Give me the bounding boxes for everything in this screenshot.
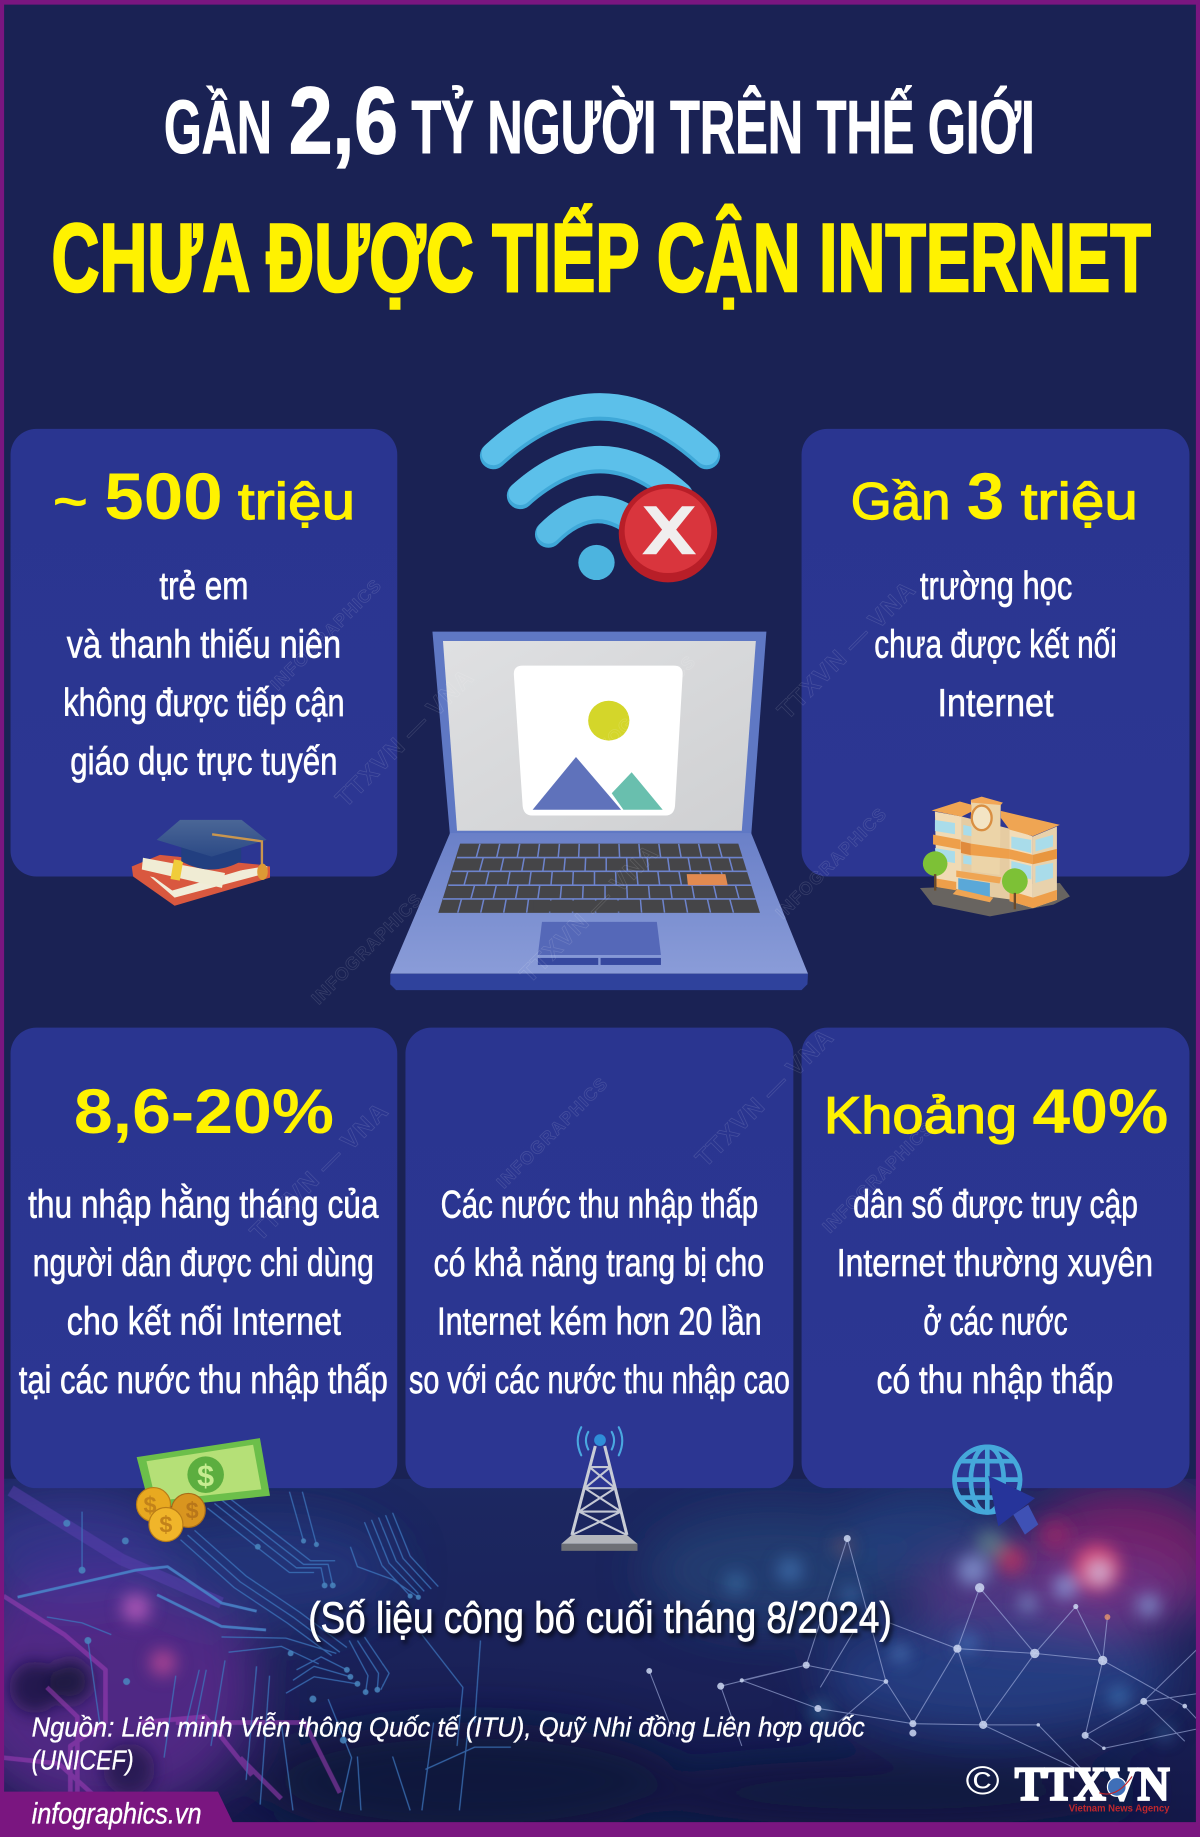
icon: graduation cap and books xyxy=(132,820,270,906)
description xyxy=(63,565,345,784)
description: cho kết nối Internet xyxy=(67,1301,341,1344)
watermarks: INFOGRAPHICS xyxy=(493,1073,612,1192)
icon: banknote and coins xyxy=(137,1438,270,1541)
panel: regular access xyxy=(802,1028,1189,1488)
logo: TTXVN: © xyxy=(966,1759,1000,1803)
stat: about 40%: 40% xyxy=(1032,1077,1168,1147)
background: circuit and network artwork xyxy=(0,1479,1200,1837)
icon: banknote and coins: $ xyxy=(197,1459,214,1493)
icon: wifi with red cross xyxy=(493,405,717,582)
stat: 500 million: 500 xyxy=(104,460,223,533)
watermarks: INFOGRAPHICS xyxy=(307,889,427,1008)
watermarks: TTXVN — VNA xyxy=(245,1097,394,1246)
keyboard xyxy=(438,844,760,913)
stat: 500 million: ~ xyxy=(53,472,88,530)
panel: children and youth xyxy=(11,429,397,876)
description: Các nước thu nhập thấp xyxy=(441,1183,758,1226)
stat: 500 million xyxy=(53,460,355,533)
laptop lid xyxy=(432,632,766,835)
description: trường học xyxy=(920,565,1072,608)
watermarks: INFOGRAPHICS xyxy=(771,803,891,923)
stat: 3 million xyxy=(851,460,1138,533)
logo: TTXVN xyxy=(966,1758,1170,1815)
description: ở các nước xyxy=(923,1301,1068,1344)
title xyxy=(52,68,1151,312)
laptop screen xyxy=(443,641,756,831)
description xyxy=(19,1183,388,1402)
laptop base xyxy=(390,833,808,974)
icon: telecom tower xyxy=(561,1427,638,1551)
source note: Nguồn: Liên minh Viễn thông Quốc tế (ITU), Quỹ Nhi đồng Liên hợp quốc xyxy=(32,1712,865,1743)
stat: about 40% xyxy=(824,1077,1168,1147)
description: giáo dục trực tuyến xyxy=(70,741,337,784)
image card on screen xyxy=(514,666,683,816)
stat: 500 million: triệu xyxy=(238,472,355,530)
stat: 3 million: 3 xyxy=(967,460,1004,533)
logo: TTXVN: Vietnam News Agency xyxy=(1069,1803,1170,1815)
description xyxy=(409,1183,790,1402)
description: thu nhập hằng tháng của xyxy=(28,1183,379,1226)
description: so với các nước thu nhập cao xyxy=(409,1359,790,1402)
description: và thanh thiếu niên xyxy=(67,623,341,666)
footer tab: infographics.vn: infographics.vn xyxy=(32,1797,202,1830)
watermarks: TTXVN — VNA xyxy=(331,664,480,813)
watermarks: INFOGRAPHICS xyxy=(818,1117,938,1237)
description: người dân được chi dùng xyxy=(33,1242,374,1285)
title line 1: GẦN xyxy=(164,85,272,169)
touchpad xyxy=(538,922,661,965)
description: không được tiếp cận xyxy=(63,682,345,725)
icon: banknote and coins: $ xyxy=(159,1512,172,1538)
source note xyxy=(32,1712,865,1775)
description xyxy=(837,1183,1153,1402)
panel: schools xyxy=(802,429,1189,876)
icon: globe and cursor xyxy=(954,1446,1038,1535)
description: tại các nước thu nhập thấp xyxy=(19,1359,388,1402)
date note: (Số liệu công bố cuối tháng 8/2024) xyxy=(308,1594,892,1642)
title line 1: 2,6 xyxy=(289,68,398,174)
panel: equipment gap xyxy=(405,1028,793,1488)
watermarks: TTXVN — VNA xyxy=(515,840,664,989)
description: chưa được kết nối xyxy=(874,623,1117,666)
description: có khả năng trang bị cho xyxy=(434,1242,764,1285)
icon: laptop xyxy=(390,632,808,990)
watermarks: INFOGRAPHICS xyxy=(580,651,700,770)
icon: banknote and coins: $ xyxy=(143,1492,157,1518)
stat: about 40%: Khoảng xyxy=(824,1086,1017,1144)
icon: banknote and coins: $ xyxy=(186,1498,199,1524)
source note: (UNICEF) xyxy=(32,1744,134,1775)
stat: 3 million: triệu xyxy=(1021,472,1138,530)
watermarks: INFOGRAPHICS xyxy=(266,575,386,694)
logo: TTXVN: TTXVN xyxy=(1015,1758,1170,1811)
watermarks xyxy=(245,575,938,1246)
watermarks: TTXVN — VNA xyxy=(691,1024,840,1173)
description: Internet kém hơn 20 lần xyxy=(437,1301,762,1344)
description xyxy=(874,565,1117,725)
icon: school building xyxy=(920,797,1070,916)
title line 1 xyxy=(164,68,1035,174)
description: có thu nhập thấp xyxy=(877,1359,1113,1402)
description: Internet xyxy=(938,682,1054,725)
stat: 3 million: Gần xyxy=(851,472,950,530)
description: trẻ em xyxy=(159,565,248,608)
stat: 8,6-20%: 8,6-20% xyxy=(74,1077,334,1147)
panel: income share xyxy=(11,1028,397,1488)
watermarks: TTXVN — VNA xyxy=(773,576,922,725)
